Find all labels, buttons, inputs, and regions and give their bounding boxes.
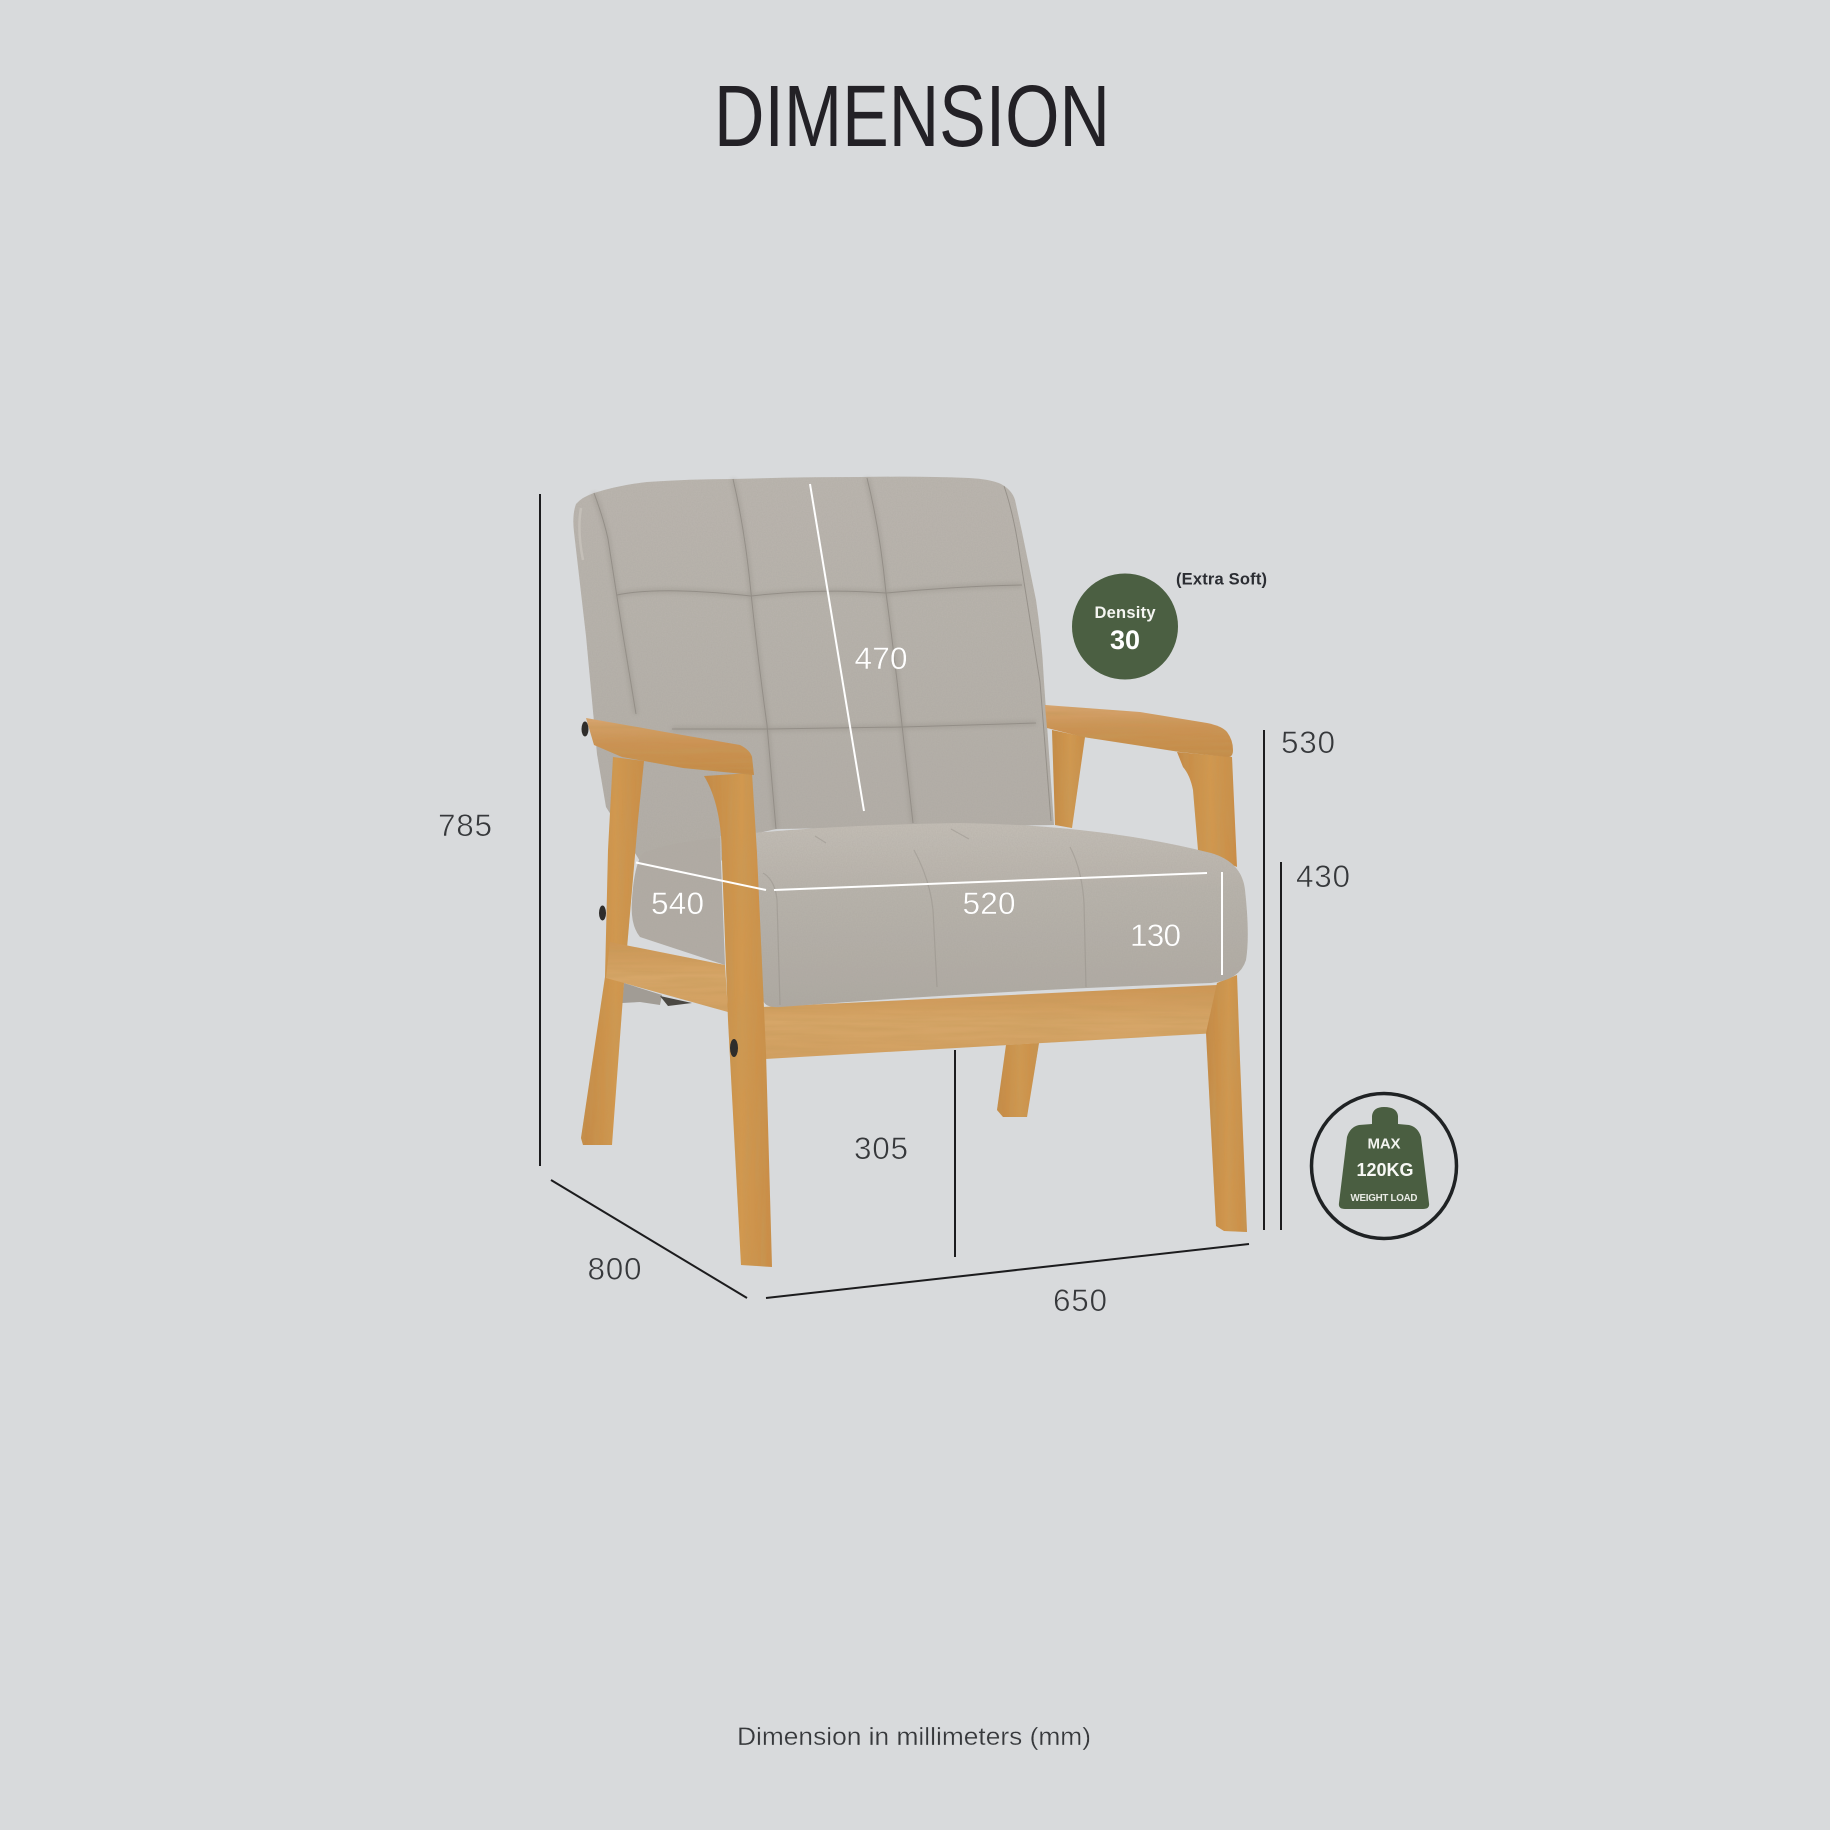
- label 650: 650: [1053, 1282, 1107, 1318]
- measurement line: width 650: [766, 1244, 1249, 1298]
- label 305: 305: [854, 1130, 908, 1166]
- backrest tufting seams: [594, 478, 1036, 829]
- front rail: [763, 985, 1217, 1059]
- rear left leg: [581, 757, 644, 1145]
- measurement line: total height 785: [539, 494, 541, 1166]
- measurement line: backrest height 470: [810, 484, 864, 811]
- rear right leg: [997, 1043, 1039, 1117]
- label 130: 130: [1130, 917, 1181, 953]
- armchair illustration: [573, 477, 1248, 1267]
- label 800: 800: [588, 1250, 642, 1286]
- hanging fabric under frame: [622, 983, 692, 1006]
- weight load badge: [1312, 1094, 1456, 1238]
- measurement line: arm height 530: [1263, 730, 1265, 1230]
- density badge: [1072, 574, 1178, 680]
- weight load badge: 120KG: [1356, 1160, 1414, 1180]
- left armrest: [586, 718, 754, 775]
- measurement line: seat width 520: [774, 873, 1207, 890]
- measurement line: seat depth 540: [636, 862, 766, 890]
- extra soft note: (Extra Soft): [1176, 570, 1267, 588]
- measurement line: depth 800: [551, 1180, 747, 1298]
- label 785: 785: [438, 807, 492, 843]
- density badge: 30: [1110, 625, 1140, 655]
- weight load badge: MAX: [1368, 1136, 1400, 1152]
- footer note: Dimension in millimeters (mm): [737, 1723, 1091, 1751]
- density badge: Density: [1094, 604, 1156, 622]
- side rail: [606, 942, 728, 1012]
- measurement line: cushion thickness 130: [1221, 872, 1223, 975]
- cushion seams: [763, 829, 1086, 1005]
- icon: weight: [1339, 1107, 1429, 1209]
- right armrest front post: [1177, 752, 1237, 867]
- seat side panel: [632, 838, 725, 965]
- label 540: 540: [651, 885, 704, 921]
- right armrest rear post: [1052, 730, 1085, 828]
- chair backrest: [573, 477, 1054, 861]
- near front leg and arm post: [704, 773, 772, 1267]
- seat cushion: [720, 823, 1248, 1007]
- label 520: 520: [962, 885, 1016, 921]
- frame bolts: [582, 722, 738, 1057]
- label 530: 530: [1281, 724, 1335, 760]
- label 430: 430: [1296, 858, 1350, 894]
- front right leg: [1206, 975, 1247, 1232]
- label 470: 470: [854, 640, 908, 676]
- title: DIMENSION: [714, 68, 1110, 165]
- right armrest: [1045, 705, 1233, 757]
- measurement line: seat height 430: [1280, 862, 1282, 1230]
- measurement line: clearance 305: [954, 1050, 956, 1257]
- weight load badge: WEIGHT LOAD: [1350, 1193, 1418, 1204]
